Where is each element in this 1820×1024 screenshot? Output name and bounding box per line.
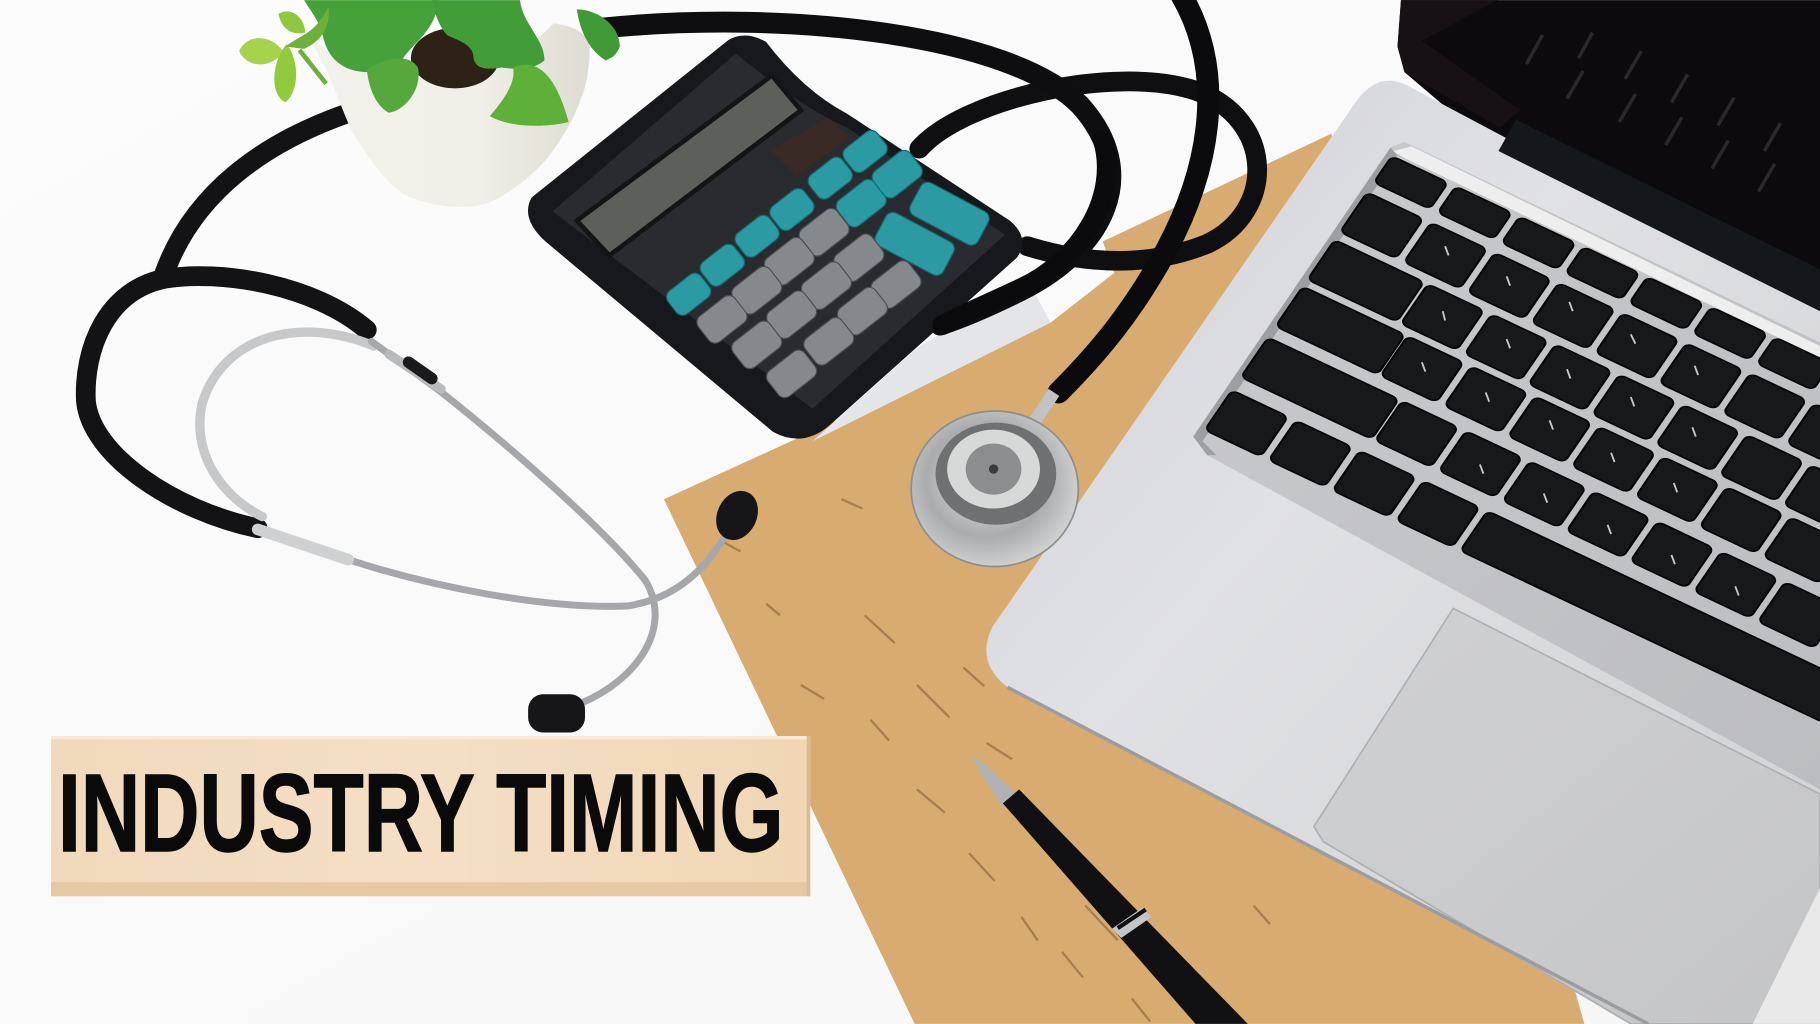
laptop screen keyboard reflection [1526, 33, 1781, 192]
laptop hinge [1498, 120, 1820, 311]
calculator body [528, 35, 1022, 439]
space bar row [1205, 390, 1820, 754]
qwerty row [1307, 240, 1820, 531]
laptop corner edge [1753, 888, 1820, 1024]
laptop screen bezel [1398, 0, 1521, 128]
calculator teal keys [663, 127, 992, 319]
trackpad [1314, 608, 1820, 1024]
wooden block label [51, 736, 810, 896]
title: INDUSTRY TIMING: INDUSTRY TIMING [58, 752, 783, 875]
stethoscope: front long tube to chestpiece [942, 0, 1208, 392]
keyboard well [1193, 142, 1820, 789]
stethoscope: chestpiece [911, 392, 1078, 567]
plant leaves [239, 0, 620, 126]
pen [973, 758, 1248, 1024]
stethoscope: left black tube and headset tubing [86, 114, 367, 528]
stethoscope: right loop tube behind calculator [919, 81, 1257, 261]
calculator grey keys [694, 205, 924, 401]
stethoscope: ear tips [528, 484, 766, 733]
calculator solar panel [771, 117, 850, 177]
keyboard key legends [1422, 246, 1739, 596]
keyboard keys [1205, 156, 1820, 754]
shift row [1241, 337, 1820, 678]
plant pot [310, 23, 590, 207]
calculator inner bezel [552, 54, 1005, 409]
plant soil [411, 28, 499, 88]
calculator display [577, 76, 801, 255]
grey sheet under calculator [812, 279, 1050, 441]
laptop screen [1398, 0, 1820, 304]
home row [1276, 286, 1820, 583]
laptop base [986, 81, 1820, 1024]
stethoscope: top tube [604, 22, 1111, 325]
laptop front edge [1008, 687, 1648, 1024]
laptop [986, 0, 1820, 1024]
calculator [528, 35, 1022, 439]
number row [1340, 192, 1820, 470]
kraft paper sheet [664, 134, 1584, 1024]
stethoscope: silver headset arms [200, 332, 734, 704]
function row [1374, 156, 1820, 390]
